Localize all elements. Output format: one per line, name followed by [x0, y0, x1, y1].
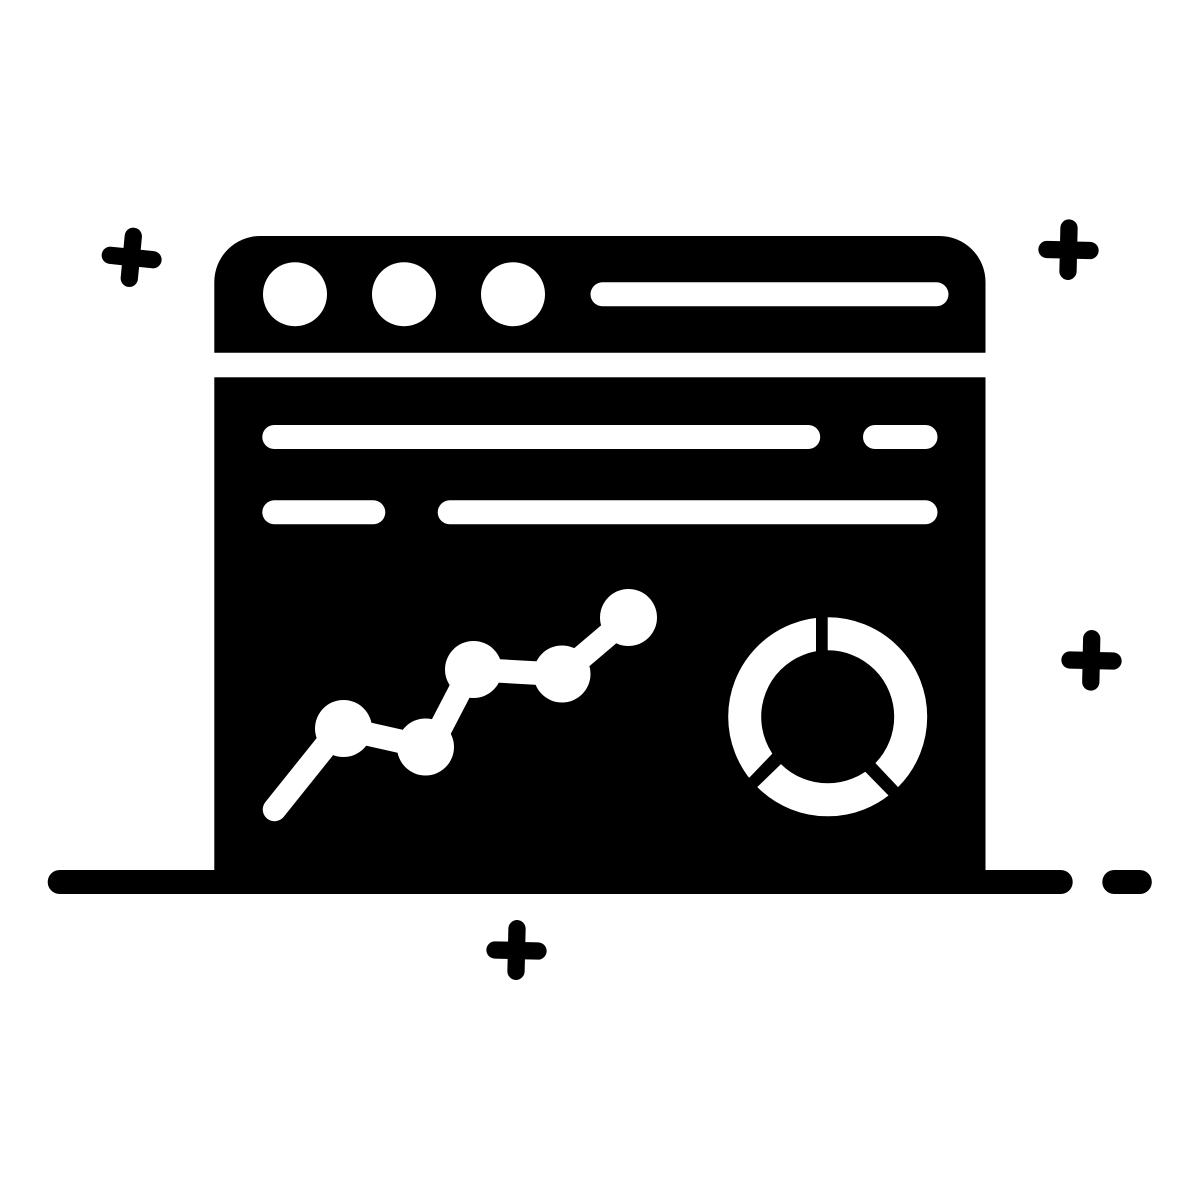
donut chart: [745, 610, 911, 800]
text line wide: [438, 500, 938, 524]
sparkle: top right: [1047, 228, 1090, 271]
sparkle: bottom: [495, 929, 538, 971]
text line long: [262, 425, 820, 449]
browser body panel: [214, 377, 986, 877]
address bar: [590, 282, 948, 306]
window button 1: [263, 262, 327, 326]
ground dash: [1102, 870, 1152, 894]
line chart: [274, 589, 657, 810]
browser title bar: [214, 236, 986, 353]
text line small: [262, 500, 385, 524]
sparkle: right: [1070, 639, 1113, 682]
window button 2: [372, 262, 436, 326]
text line short: [863, 425, 938, 449]
sparkle: top left: [110, 236, 153, 278]
ground line: [48, 870, 1152, 894]
window button 3: [481, 262, 545, 326]
